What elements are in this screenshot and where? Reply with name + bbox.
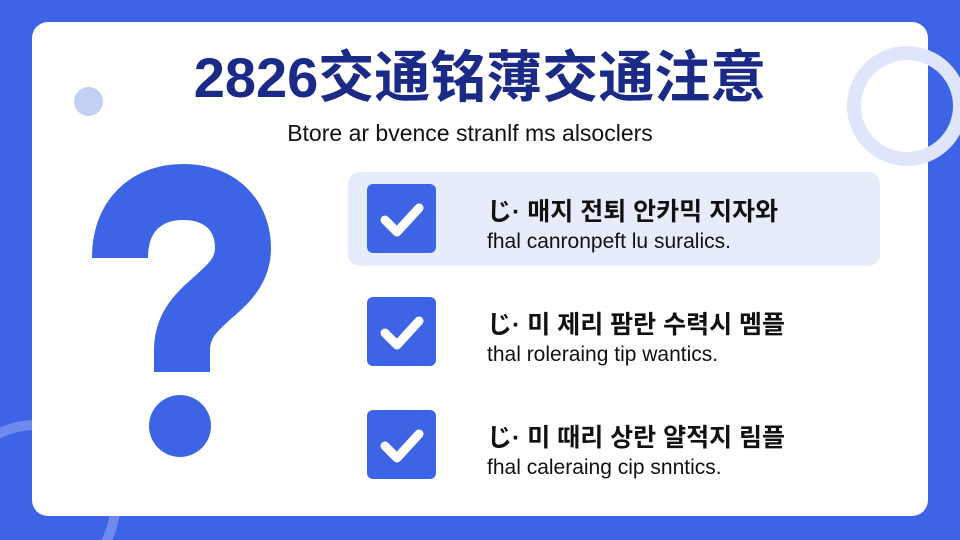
text 1 [487,198,778,253]
text 2: thal roleraing tip wantics. [487,343,718,366]
text 2 [487,311,785,366]
subtitle: Btore ar bvence stranlf ms alsoclers [287,120,653,146]
title: 2826交通铭薄交通注意 [194,46,766,109]
icon: question mark [92,164,271,457]
icon: checkbox 1 [367,184,436,253]
text 2: じ· 미 제리 팜란 수력시 멤플 [487,311,785,339]
icon: checkbox 3 [367,410,436,479]
decorative ring bottom-left [0,420,120,540]
decorative dot [74,87,103,116]
text 3: じ· 미 때리 상란 얄적지 림플 [487,424,785,452]
decorative ring top-right [847,46,960,166]
item 3 [367,410,785,479]
icon: checkbox 2 [367,297,436,366]
text 3 [487,424,785,479]
text 1: じ· 매지 전퇴 안카믹 지자와 [487,198,778,226]
text 1: fhal canronpeft lu suralics. [487,230,731,253]
item 2 [367,297,785,366]
text 3: fhal caleraing cip snntics. [487,456,722,479]
item 1 highlighted [348,172,880,266]
